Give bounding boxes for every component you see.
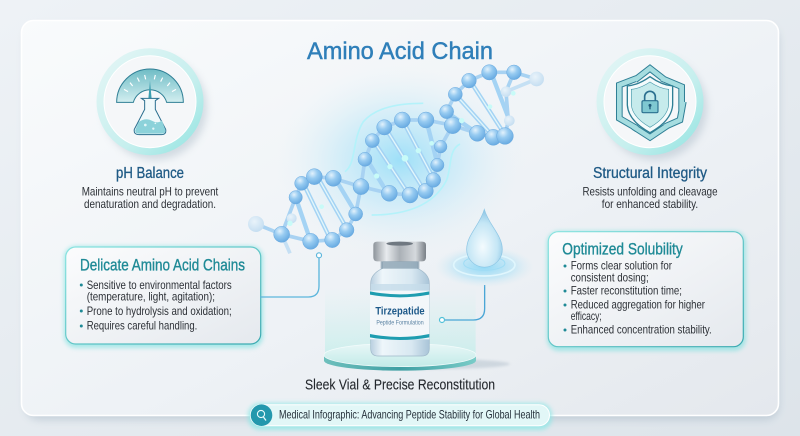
footer pill	[248, 403, 552, 430]
light column	[325, 287, 476, 357]
rungs	[296, 74, 509, 241]
icon: interlocked hexagon shield with padlock	[596, 48, 707, 160]
sparkles	[287, 91, 516, 226]
panel: optimized solubility	[547, 231, 746, 351]
caption: Sleek Vial & Precise Reconstitution	[305, 376, 495, 394]
heading: Delicate Amino Acid Chains	[80, 257, 245, 275]
text: integrity description: Resists unfolding and cleavage	[582, 185, 718, 199]
central glow	[275, 65, 525, 255]
text: pH description: denaturation and degradation.	[84, 197, 216, 211]
connector: left box to DNA	[260, 258, 319, 297]
rung highlights	[305, 82, 505, 238]
bullet list: efficacy;	[571, 309, 602, 323]
nodes	[274, 65, 521, 249]
heading: Optimized Solubility	[562, 240, 683, 258]
water ripple	[435, 246, 534, 287]
icon: water drop	[467, 209, 502, 267]
bullet list: (temperature, light, agitation);	[87, 289, 215, 303]
bullet list: Enhanced concentration stability.	[571, 323, 712, 337]
bullet list	[564, 259, 712, 337]
icon: pH gauge and flask	[96, 48, 207, 160]
backbone strands	[256, 72, 537, 253]
panel: structural integrity	[582, 48, 718, 211]
connector: vial to water drop	[445, 285, 485, 320]
vial label text: Tirzepatide	[375, 306, 425, 318]
heading: Structural Integrity: Structural Integrity	[593, 165, 707, 182]
icon: magnifier	[251, 404, 272, 426]
vial on platform with water drop	[260, 209, 534, 371]
panel: pH balance	[82, 48, 219, 211]
glow arcs	[345, 103, 460, 215]
bullet list: Faster reconstitution time;	[571, 284, 682, 298]
panel: delicate amino acid chains	[64, 246, 263, 348]
bullet list: Forms clear solution for	[571, 259, 672, 273]
bullet list: Requires careful handling.	[87, 319, 197, 333]
bullet list	[80, 278, 232, 333]
bullet list: Sensitive to environmental factors	[87, 278, 232, 292]
DNA double helix	[248, 65, 544, 253]
bullet list: Prone to hydrolysis and oxidation;	[87, 304, 232, 318]
footer text: Medical Infographic: Advancing Peptide Stability for Global Health	[279, 408, 540, 422]
pale end nodes	[248, 72, 544, 232]
vial: Peptide Formulation	[376, 319, 424, 326]
text: pH description: Maintains neutral pH to prevent	[82, 185, 219, 199]
heading: pH Balance: pH Balance	[116, 165, 184, 182]
bullet list: consistent dosing;	[571, 271, 649, 285]
vial	[370, 242, 429, 356]
platform	[324, 343, 510, 371]
text: integrity description: for enhanced stability.	[602, 197, 698, 211]
text: pH description	[82, 185, 219, 211]
bullet list: Reduced aggregation for higher	[571, 297, 705, 311]
title: Amino Acid Chain	[307, 38, 493, 65]
text: integrity description	[582, 185, 718, 211]
